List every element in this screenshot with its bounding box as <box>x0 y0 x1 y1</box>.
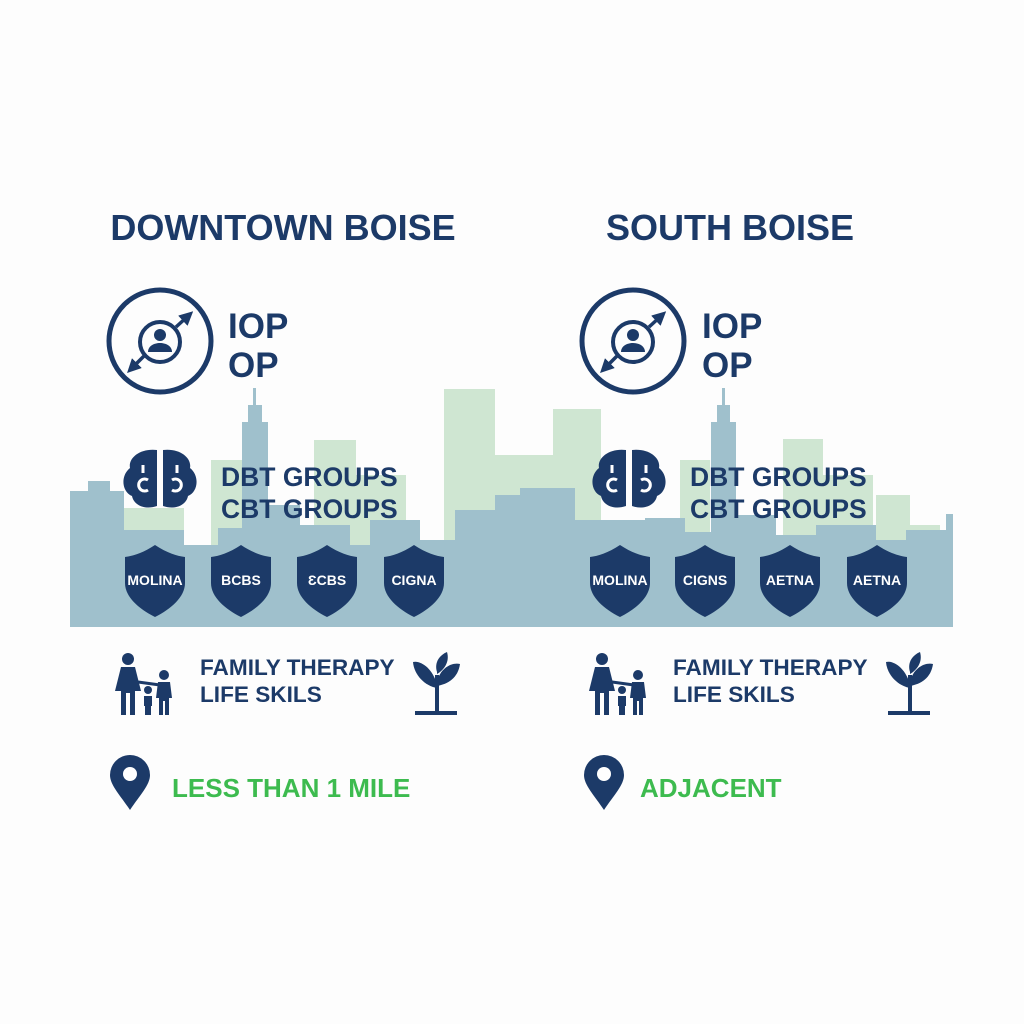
icon: IOP circle <box>582 290 684 392</box>
insurance shields: MOLINA <box>127 572 183 588</box>
insurance shields: CIGNS <box>683 572 727 588</box>
insurance shields: BCBS <box>221 572 261 588</box>
panel: south <box>582 290 933 810</box>
text: IOP OP: OP <box>228 346 279 385</box>
text: groups: DBT GROUPS <box>690 462 867 492</box>
icon: plant <box>413 652 460 715</box>
insurance shields: CIGNA <box>391 572 437 588</box>
text: distance: LESS THAN 1 MILE <box>172 773 410 803</box>
icon: family <box>115 653 172 715</box>
text: groups: CBT GROUPS <box>690 494 867 524</box>
skyline <box>70 388 953 627</box>
text: groups: DBT GROUPS <box>221 462 398 492</box>
text: family therapy: FAMILY THERAPY <box>673 655 868 680</box>
icon: brain <box>592 450 666 508</box>
text: groups: CBT GROUPS <box>221 494 398 524</box>
icon: family <box>589 653 646 715</box>
text: distance: ADJACENT <box>640 773 782 803</box>
insurance shields <box>125 545 444 617</box>
title: downtown boise: DOWNTOWN BOISE <box>110 207 456 248</box>
insurance shields: AETNA <box>766 572 814 588</box>
insurance shields: ƐCBS <box>308 572 346 588</box>
text: IOP OP: OP <box>702 346 753 385</box>
panel: downtown <box>109 290 460 810</box>
icon: pin <box>584 755 624 810</box>
icon: IOP circle <box>109 290 211 392</box>
text: IOP OP: IOP <box>228 307 288 346</box>
title: south boise: SOUTH BOISE <box>606 207 854 248</box>
text: IOP OP: IOP <box>702 307 762 346</box>
icon: pin <box>110 755 150 810</box>
text: family therapy: FAMILY THERAPY <box>200 655 395 680</box>
insurance shields: AETNA <box>853 572 901 588</box>
text: family therapy: LIFE SKILS <box>200 682 322 707</box>
text: family therapy: LIFE SKILS <box>673 682 795 707</box>
insurance shields <box>590 545 907 617</box>
icon: plant <box>886 652 933 715</box>
icon: brain <box>123 450 197 508</box>
insurance shields: MOLINA <box>592 572 648 588</box>
